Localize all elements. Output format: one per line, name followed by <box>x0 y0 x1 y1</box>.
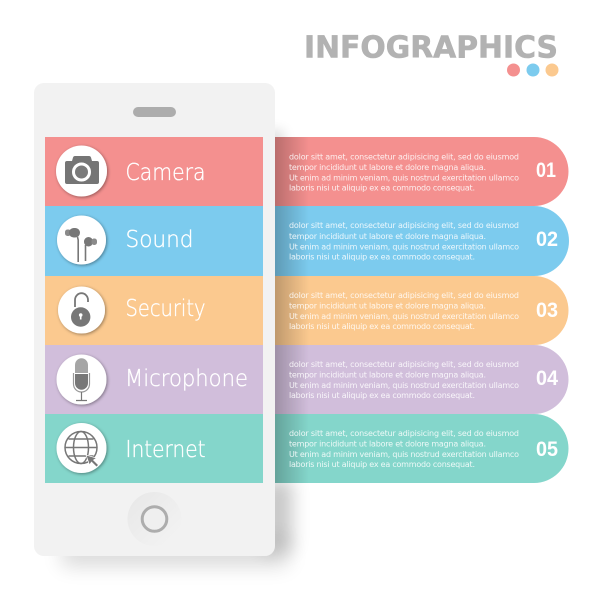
panel: 05 description pill: dolor sitt amet, consectetur adipisicing elit, sed do eiusmod <box>289 429 519 438</box>
panel: 03 description pill: tempor incididunt ut labore et dolore magna aliqua. <box>289 302 486 310</box>
panel: 04 description pill: 04 <box>536 367 558 390</box>
label: Security: Security <box>126 294 206 322</box>
panel: 03 description pill: 03 <box>536 299 558 322</box>
panel: 03 description pill: dolor sitt amet, consectetur adipisicing elit, sed do eiusmod <box>289 291 519 300</box>
panel: 03 description pill <box>275 276 568 345</box>
panel: 04 description pill: dolor sitt amet, consectetur adipisicing elit, sed do eiusmod <box>289 360 519 369</box>
panel: 02 description pill: dolor sitt amet, consectetur adipisicing elit, sed do eiusmod <box>289 221 519 230</box>
home button <box>128 492 182 546</box>
icon: camera <box>56 146 107 196</box>
panel: 04 description pill: laboris nisi ut aliquip ex ea commodo consequat. <box>289 391 475 400</box>
icon: padlock <box>58 286 105 334</box>
panel: 02 description pill: tempor incididunt ut labore et dolore magna aliqua. <box>289 232 486 241</box>
label: Camera: Camera <box>126 158 206 186</box>
panel: 01 description pill: tempor incididunt ut labore et dolore magna aliqua. <box>289 163 486 172</box>
panel: 05 description pill: Ut enim ad minim veniam, quis nostrud exercitation ullamco <box>289 450 519 459</box>
phone shadow <box>62 130 292 566</box>
speaker <box>133 107 176 117</box>
title: INFOGRAPHICS <box>304 30 558 66</box>
panel: 04 description pill: tempor incididunt ut labore et dolore magna aliqua. <box>289 370 486 380</box>
colour dots <box>507 64 558 76</box>
phone body <box>34 83 275 556</box>
panel: 03 description pill: laboris nisi ut aliquip ex ea commodo consequat. <box>289 322 475 331</box>
panel: 01 description pill: dolor sitt amet, consectetur adipisicing elit, sed do eiusmod <box>289 152 519 162</box>
panel: 04 description pill <box>275 345 568 414</box>
panel: 04 description pill: Ut enim ad minim veniam, quis nostrud exercitation ullamco <box>289 381 519 390</box>
panel: 02 description pill: Ut enim ad minim veniam, quis nostrud exercitation ullamco <box>289 242 519 252</box>
panel: 05 description pill: laboris nisi ut aliquip ex ea commodo consequat. <box>289 460 475 469</box>
label: Microphone: Microphone <box>125 364 248 392</box>
panel: 02 description pill: laboris nisi ut aliquip ex ea commodo consequat. <box>289 252 475 262</box>
panel: 02 description pill: 02 <box>536 228 558 251</box>
panel: 05 description pill: 05 <box>536 438 558 461</box>
panel: 02 description pill <box>275 206 569 276</box>
panel: 01 description pill: 01 <box>536 159 556 182</box>
label: Internet: Internet <box>126 435 206 463</box>
icon: microphone <box>56 354 106 404</box>
panel: camera row <box>45 137 263 206</box>
panel: 05 description pill: tempor incididunt ut labore et dolore magna aliqua. <box>289 440 486 448</box>
icon: earphones <box>57 216 106 264</box>
panel: 01 description pill: Ut enim ad minim veniam, quis nostrud exercitation ullamco <box>289 174 519 182</box>
panel: 03 description pill: Ut enim ad minim veniam, quis nostrud exercitation ullamco <box>289 312 519 321</box>
panel: security row <box>45 276 263 345</box>
panel: 05 description pill <box>275 414 568 483</box>
icon: globe with cursor <box>56 423 106 473</box>
panel: sound row <box>45 206 263 276</box>
panel: microphone row <box>45 345 263 414</box>
panel: 01 description pill: laboris nisi ut aliquip ex ea commodo consequat. <box>289 184 475 192</box>
label: Sound: Sound <box>126 225 194 253</box>
panel: internet row <box>45 414 263 483</box>
panel: 01 description pill <box>275 137 568 206</box>
